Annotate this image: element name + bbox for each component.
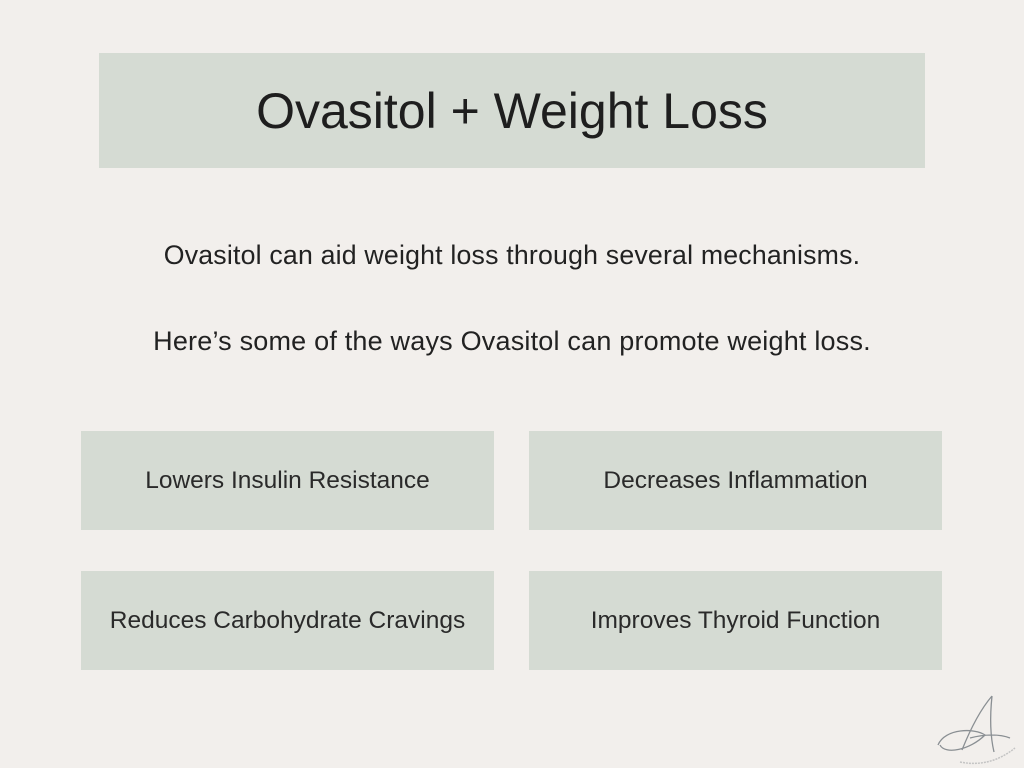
card: Decreases Inflammation: Decreases Inflammation (603, 466, 868, 494)
intro text line 2: Here’s some of the ways Ovasitol can promote weight loss. (153, 326, 871, 356)
intro text line 1: Ovasitol can aid weight loss through several mechanisms. (164, 240, 860, 270)
title banner: Ovasitol + Weight Loss (256, 82, 768, 138)
card: Lowers Insulin Resistance: Lowers Insulin Resistance (145, 466, 430, 494)
title banner (99, 53, 925, 168)
logo monogram (938, 696, 1016, 764)
card: Improves Thyroid Function (529, 571, 942, 670)
card: Reduces Carbohydrate Cravings: Reduces Carbohydrate Cravings (110, 606, 465, 634)
card: Reduces Carbohydrate Cravings (81, 571, 494, 670)
card: Improves Thyroid Function: Improves Thyroid Function (591, 606, 880, 634)
card: Lowers Insulin Resistance (81, 431, 494, 530)
card: Decreases Inflammation (529, 431, 942, 530)
